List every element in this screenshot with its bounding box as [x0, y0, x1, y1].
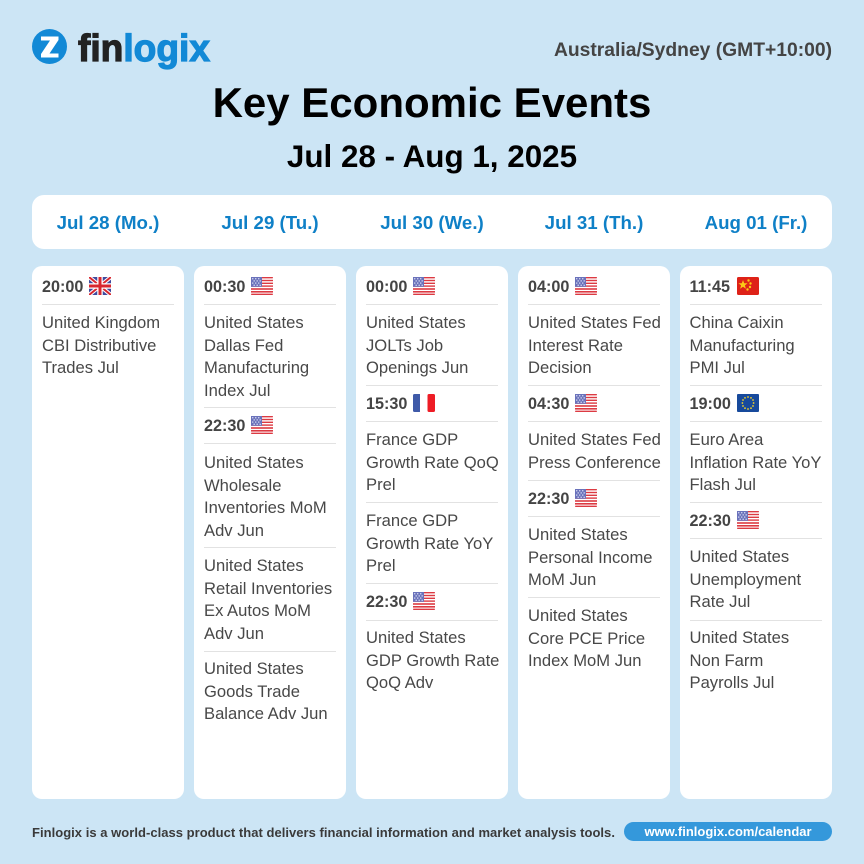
event text: Rate Jul [690, 592, 750, 611]
flag: United States [575, 277, 597, 295]
event text: Inflation Rate YoY [690, 452, 821, 472]
event text [528, 430, 661, 472]
event text: GDP Growth Rate [366, 650, 499, 670]
event text: Core PCE Price [528, 628, 645, 648]
event text: CBI Distributive [42, 336, 156, 354]
event text: United States [204, 659, 304, 678]
title: Key Economic Events [213, 79, 651, 126]
day: Aug 01: Aug 01 (Fr.) [705, 212, 807, 233]
flag: United States [251, 416, 273, 434]
event text: JOLTs Job [366, 336, 443, 354]
day: Jul 30: Jul 30 (We.) [380, 212, 484, 233]
event text: Ex Autos MoM [204, 601, 311, 620]
event text: QoQ Adv [366, 673, 433, 692]
event text: China Caixin [690, 313, 784, 332]
panel: Jul 28 events [32, 266, 184, 799]
event text: Trades Jul [42, 358, 119, 377]
event text [690, 628, 789, 692]
event text: Balance Adv Jun [204, 704, 328, 723]
flag: United States [575, 394, 597, 412]
event text: Euro Area [690, 430, 763, 449]
flag: United States [737, 511, 759, 529]
event text: Inventories MoM [204, 498, 327, 517]
event text: United States [528, 525, 628, 544]
flag: United Kingdom [89, 277, 111, 295]
event text: United States [204, 453, 304, 472]
event text: Unemployment [690, 570, 801, 588]
event text: Openings Jun [366, 358, 468, 377]
event text: United States [690, 628, 789, 647]
time 19:00: 19:00 [690, 395, 731, 413]
logo [32, 28, 211, 70]
day: Jul 28: Jul 28 (Mo.) [57, 212, 159, 233]
event text: Prel [366, 475, 396, 494]
event text: Prel [366, 556, 396, 575]
time 04:00: 04:00 [528, 278, 569, 296]
flag: United States [413, 277, 435, 295]
time 00:30: 00:30 [204, 278, 245, 296]
event text: MoM Jun [528, 570, 596, 589]
event text: Retail Inventories [204, 578, 332, 598]
event text: United States Fed [528, 430, 661, 449]
date range: Jul 28 - Aug 1, 2025 [287, 139, 577, 174]
flag: Euro Area [737, 394, 759, 412]
event text [204, 659, 328, 723]
event text: Flash Jul [690, 475, 756, 494]
event text [366, 628, 499, 692]
event text: France GDP [366, 511, 458, 530]
event text [366, 511, 493, 575]
event text [528, 525, 653, 589]
event text [204, 453, 327, 540]
event text [204, 556, 332, 642]
event text: France GDP [366, 430, 458, 449]
event text: United States [690, 547, 789, 566]
flag: United States [575, 489, 597, 507]
event text: Adv Jun [204, 624, 264, 642]
event text: Dallas Fed [204, 336, 283, 354]
panel: Jul 30 events [356, 266, 508, 799]
event text [690, 547, 801, 611]
event text: PMI Jul [690, 358, 745, 377]
flag: France [413, 394, 435, 412]
event text: Index MoM Jun [528, 651, 641, 670]
flag: United States [251, 277, 273, 295]
event text: United States [366, 313, 466, 332]
event text [528, 313, 661, 377]
event text: Wholesale [204, 476, 281, 494]
event text: Personal Income [528, 548, 653, 566]
panel: Jul 31 events [518, 266, 670, 799]
event text [366, 313, 468, 377]
day: Jul 29: Jul 29 (Tu.) [221, 212, 319, 233]
event text: Adv Jun [204, 520, 264, 540]
panel: Jul 29 events [194, 266, 346, 799]
event text: Manufacturing [204, 358, 309, 377]
event text [690, 313, 795, 377]
time 00:00: 00:00 [366, 278, 407, 296]
flag: China [737, 277, 759, 295]
event text [366, 430, 499, 494]
time 22:30: 22:30 [528, 490, 569, 508]
logo mark [32, 29, 67, 64]
time 22:30: 22:30 [366, 593, 407, 611]
event text: Growth Rate YoY [366, 534, 493, 552]
time 11:45: 11:45 [690, 278, 730, 296]
time 15:30: 15:30 [366, 395, 407, 413]
event text: United States [204, 313, 304, 332]
event text [528, 606, 645, 670]
event text: Growth Rate QoQ [366, 452, 499, 472]
event text [42, 313, 160, 377]
event text: United Kingdom [42, 313, 160, 332]
time 22:30: 22:30 [690, 512, 731, 530]
footer tagline: Finlogix is a world-class product that delivers financial information and market analysis tools. [32, 825, 615, 840]
event text: Interest Rate [528, 336, 623, 354]
panel: Aug 01 events [680, 266, 832, 799]
logo wordmark: finlogix [78, 28, 210, 70]
event text: Payrolls Jul [690, 673, 774, 692]
website button [624, 822, 832, 841]
event text: United States [204, 556, 304, 575]
time 20:00: 20:00 [42, 278, 83, 296]
event text: Non Farm [690, 650, 763, 670]
event text: United States Fed [528, 313, 661, 332]
day: Jul 31: Jul 31 (Th.) [545, 212, 643, 233]
website button: www.finlogix.com/calendar [644, 824, 812, 839]
time 22:30: 22:30 [204, 417, 245, 435]
event text: Press Conference [528, 452, 661, 472]
event text: United States [366, 628, 466, 647]
weekday header bar [32, 195, 832, 249]
time 04:30: 04:30 [528, 395, 569, 413]
flag: United States [413, 592, 435, 610]
event text [204, 313, 309, 400]
event text: Decision [528, 358, 592, 377]
event text [690, 430, 821, 494]
event text: Index Jul [204, 380, 270, 400]
event text: United States [528, 606, 628, 625]
timezone label: Australia/Sydney (GMT+10:00) [554, 40, 832, 61]
event text: Manufacturing [690, 336, 795, 354]
event text: Goods Trade [204, 682, 300, 700]
